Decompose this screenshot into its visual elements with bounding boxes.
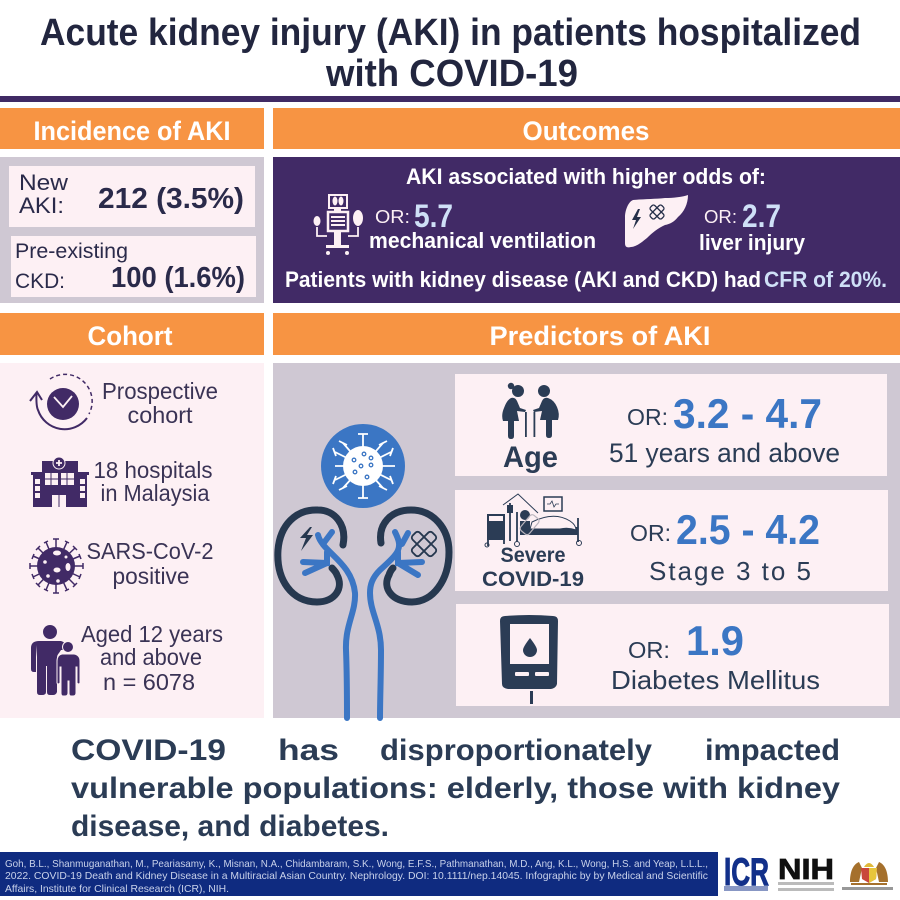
logo: ICR: ICR <box>724 851 769 894</box>
panel: incidence of AKI <box>0 157 264 303</box>
panel: outcomes: OR: <box>704 207 737 227</box>
heading: Outcomes: Outcomes <box>522 116 650 146</box>
box: diabetes: OR: <box>628 637 670 663</box>
panel: incidence of AKI: New <box>19 170 68 195</box>
box: age: 3.2 - 4.7 <box>673 390 822 437</box>
panel: cohort: and above <box>100 644 202 670</box>
citation footer <box>0 852 718 896</box>
icon: adult and child <box>31 625 80 696</box>
box: severe COVID-19 <box>455 490 888 591</box>
box: diabetes <box>456 604 889 706</box>
icon: virus <box>30 539 83 593</box>
heading: Predictors of AKI <box>273 313 900 355</box>
icon: coronavirus in blue circle <box>321 424 405 508</box>
box: severe COVID-19: Stage 3 to 5 <box>649 556 811 586</box>
heading: Predictors of AKI: Predictors of AKI <box>490 321 710 351</box>
panel: cohort: SARS-CoV-2 <box>86 538 214 564</box>
panel: predictors of AKI <box>273 363 900 718</box>
conclusion text <box>71 734 840 843</box>
heading: Incidence of AKI <box>0 108 264 149</box>
citation footer: 2022. COVID-19 Death and Kidney Disease in a Multiracial Asian Country. Nephrology. DOI: 10.1111/nep.14045. Infographic by by Medical and Scientific <box>5 870 708 882</box>
citation footer: Goh, B.L., Shanmuganathan, M., Peariasamy, K., Misnan, N.A., Chidambaram, S.K., Wong, E.F.S., Pathmanathan, M.D., Ang, K.L., Wong, H.S. and Yeap, L.L.L., <box>5 858 708 870</box>
icon: hospital <box>31 457 89 507</box>
box: diabetes: 1.9 <box>686 617 744 664</box>
panel: outcomes <box>273 157 900 303</box>
illustration: kidneys and ureters <box>278 510 449 718</box>
box: severe COVID-19: OR: <box>630 520 671 546</box>
conclusion text: disproportionately <box>380 734 652 767</box>
panel: outcomes: 5.7 <box>414 198 453 234</box>
icon: glucose meter <box>500 615 558 704</box>
conclusion text: has <box>278 734 339 767</box>
conclusion text: vulnerable populations: elderly, those with kidney <box>71 772 840 805</box>
conclusion text: COVID-19 <box>71 734 226 767</box>
icon: clock <box>30 374 92 429</box>
box: severe COVID-19: 2.5 - 4.2 <box>676 506 820 553</box>
panel: cohort: positive <box>112 563 190 589</box>
logo: ICR <box>724 851 769 894</box>
panel: cohort: Prospective <box>102 378 218 404</box>
citation footer: Affairs, Institute for Clinical Research (ICR), NIH. <box>5 883 229 895</box>
box: age: 51 years and above <box>609 438 840 468</box>
icon: ventilator <box>314 195 363 255</box>
box: severe COVID-19: Severe <box>500 544 566 567</box>
panel: incidence of AKI: CKD: <box>15 270 65 293</box>
logo: Malaysia coat of arms <box>842 862 893 890</box>
box: age: Age <box>503 441 558 474</box>
panel: incidence of AKI: 100 (1.6%) <box>111 262 245 294</box>
conclusion text: impacted <box>705 734 840 767</box>
title <box>40 12 861 95</box>
icon: liver <box>625 195 688 247</box>
panel: outcomes: Patients with kidney disease (AKI and CKD) had <box>285 267 761 292</box>
panel: outcomes: mechanical ventilation <box>369 228 596 253</box>
title: with COVID-19 <box>325 53 578 95</box>
panel: outcomes: OR: <box>375 207 410 227</box>
box: severe COVID-19: COVID-19 <box>482 568 584 591</box>
panel: outcomes: 2.7 <box>742 198 781 234</box>
panel: cohort: Aged 12 years <box>81 621 223 647</box>
title: Acute kidney injury (AKI) in patients hospitalized <box>40 12 861 54</box>
heading: Outcomes <box>273 108 900 149</box>
panel: outcomes: AKI associated with higher odds of: <box>406 164 766 189</box>
panel: incidence of AKI: 212 (3.5%) <box>98 183 244 215</box>
conclusion text: disease, and diabetes. <box>71 810 389 843</box>
heading: Cohort <box>0 313 264 355</box>
panel: cohort: 18 hospitals <box>94 457 212 483</box>
panel: outcomes: CFR of 20%. <box>764 267 887 292</box>
panel: cohort <box>0 363 264 718</box>
box: age <box>455 374 887 476</box>
box: diabetes: Diabetes Mellitus <box>611 665 820 695</box>
panel: incidence of AKI: AKI: <box>19 193 64 218</box>
panel: incidence of AKI: Pre-existing <box>15 240 128 263</box>
icon: patient in hospital bed <box>485 494 582 547</box>
heading: Cohort: Cohort <box>88 321 172 351</box>
panel: cohort: cohort <box>128 402 193 428</box>
panel: cohort: n = 6078 <box>103 669 195 695</box>
icon: elderly couple <box>502 383 559 439</box>
box: age: OR: <box>627 404 668 430</box>
panel: cohort: in Malaysia <box>100 480 210 506</box>
logo: NIH: NIH <box>778 854 834 886</box>
heading: Incidence of AKI: Incidence of AKI <box>34 116 230 146</box>
panel: outcomes: liver injury <box>699 230 806 255</box>
